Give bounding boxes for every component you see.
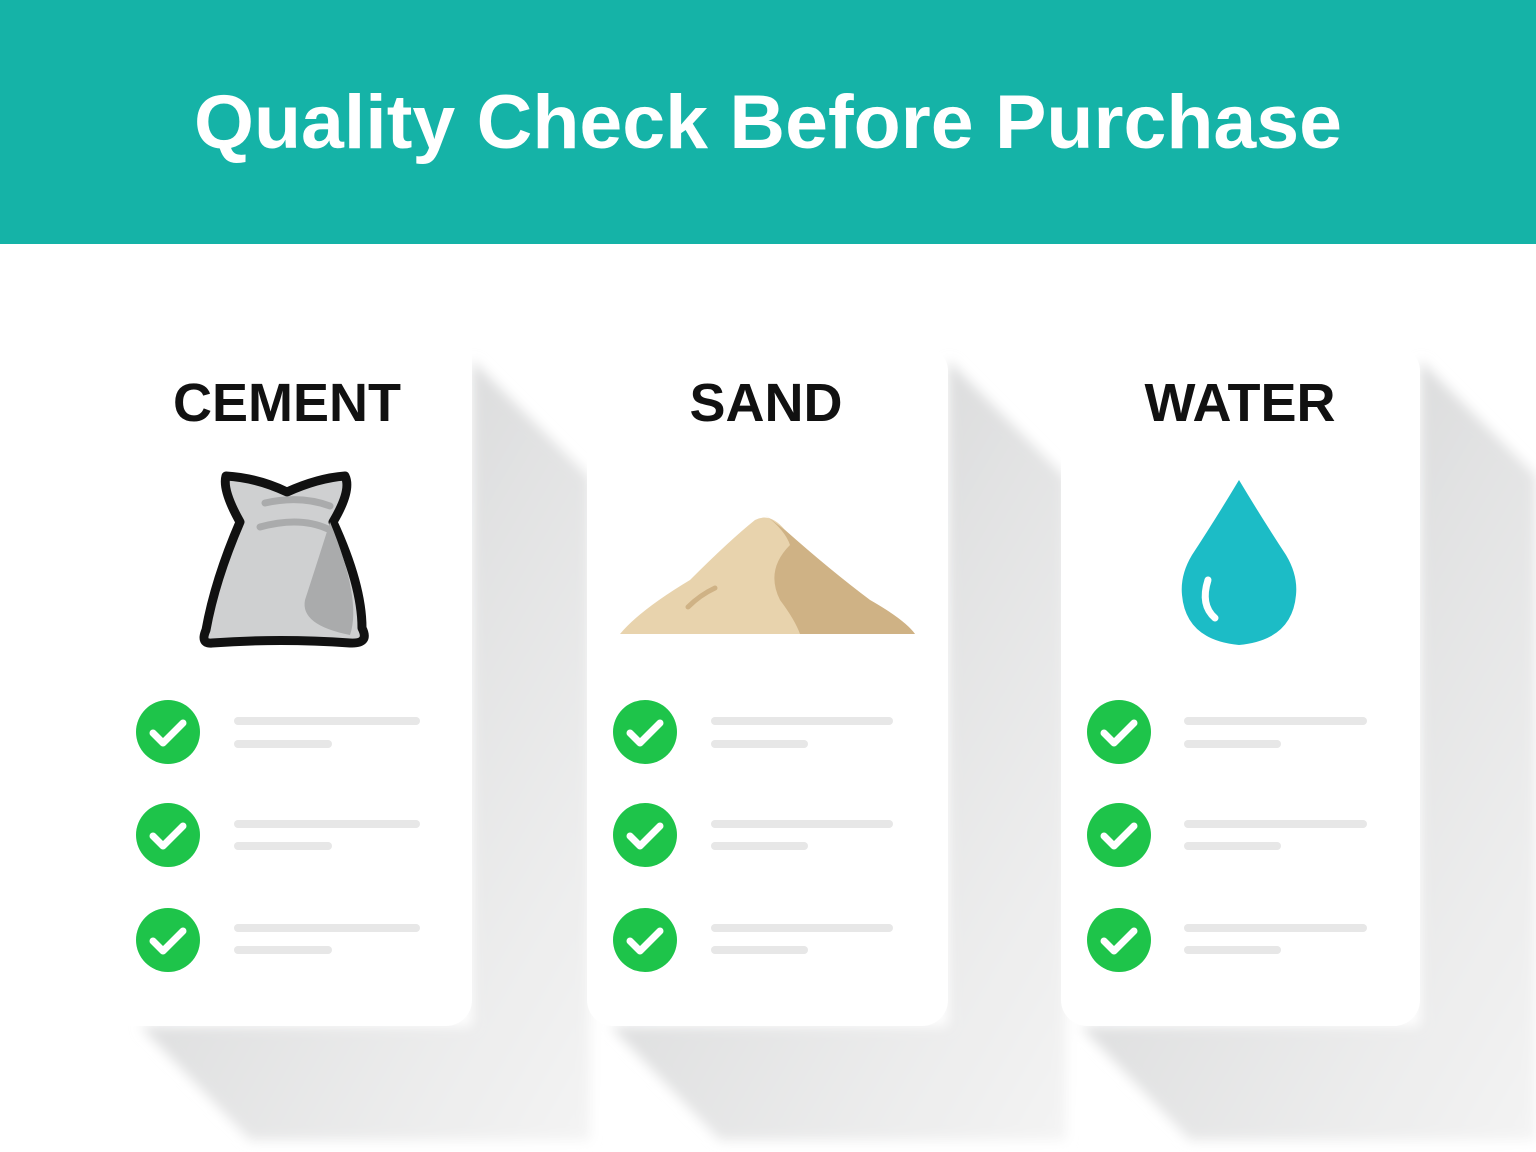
shadow: cards bbox=[140, 360, 1536, 1140]
checklist: water bbox=[1087, 700, 1367, 972]
icon: cement bag bbox=[204, 476, 364, 643]
heading: water: WATER bbox=[1145, 373, 1335, 433]
heading: sand: SAND bbox=[689, 373, 843, 433]
panel: cement bbox=[110, 345, 472, 1026]
header bbox=[0, 0, 1536, 244]
checklist: sand bbox=[613, 700, 893, 972]
panel: water bbox=[1061, 345, 1420, 1026]
panel: sand bbox=[587, 345, 948, 1026]
heading: cement: CEMENT bbox=[173, 373, 401, 433]
title: Quality Check Before Purchase bbox=[194, 80, 1342, 165]
checklist: cement bbox=[136, 700, 420, 972]
icon: sand pile bbox=[620, 515, 915, 634]
icon: water drop bbox=[1182, 480, 1296, 645]
